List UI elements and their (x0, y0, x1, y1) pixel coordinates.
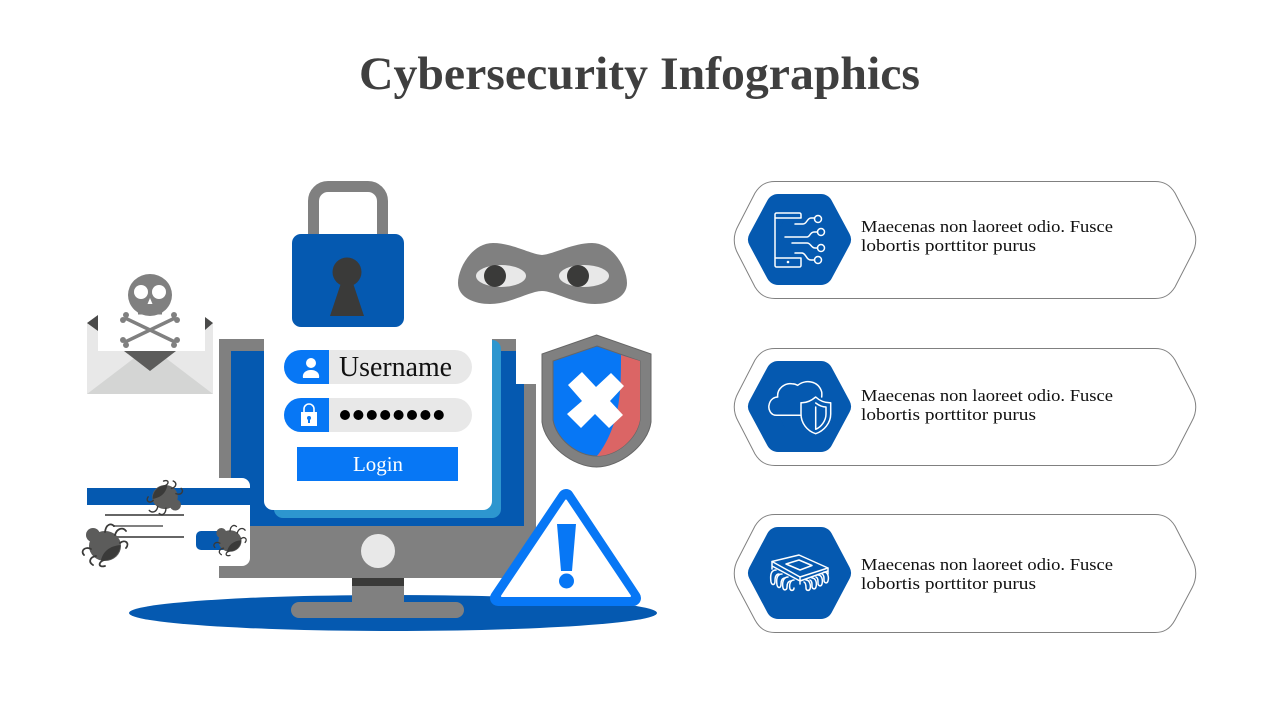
text block: Maecenas non laoreet odio. Fusce (861, 386, 1113, 405)
monitor (219, 339, 537, 618)
ground shadow ellipse (129, 595, 657, 631)
password field (284, 398, 472, 432)
title: Cybersecurity Infographics (359, 48, 920, 100)
phishing envelope with skull (87, 274, 213, 394)
bug top (146, 479, 184, 516)
icon: phone circuit (760, 206, 839, 273)
panel: cloud security (734, 348, 1196, 466)
text block: lobortis porttitor purus (861, 236, 1036, 255)
illustration: computer login scene (83, 186, 657, 631)
icon: microchip (760, 539, 839, 607)
username field (284, 350, 472, 384)
panel: mobile network security (734, 182, 1196, 298)
username field: Username (339, 352, 452, 383)
skull and crossbones (120, 274, 180, 348)
text block: lobortis porttitor purus (861, 574, 1036, 593)
text block (861, 386, 1113, 424)
security shield (542, 335, 651, 467)
bug right (214, 525, 246, 556)
warning triangle (498, 497, 633, 598)
login card (264, 325, 501, 518)
robber mask (458, 243, 627, 304)
icon: cloud shield (760, 373, 839, 440)
bug left (83, 524, 127, 566)
padlock (292, 186, 404, 327)
login button: Login (353, 452, 403, 476)
login button (297, 447, 458, 481)
panel: hardware security (734, 514, 1196, 632)
infected credit card (87, 478, 250, 566)
text block: Maecenas non laoreet odio. Fusce (861, 217, 1113, 236)
text block (861, 555, 1113, 593)
text block: lobortis porttitor purus (861, 405, 1036, 424)
text block (861, 217, 1113, 255)
text block: Maecenas non laoreet odio. Fusce (861, 555, 1113, 574)
